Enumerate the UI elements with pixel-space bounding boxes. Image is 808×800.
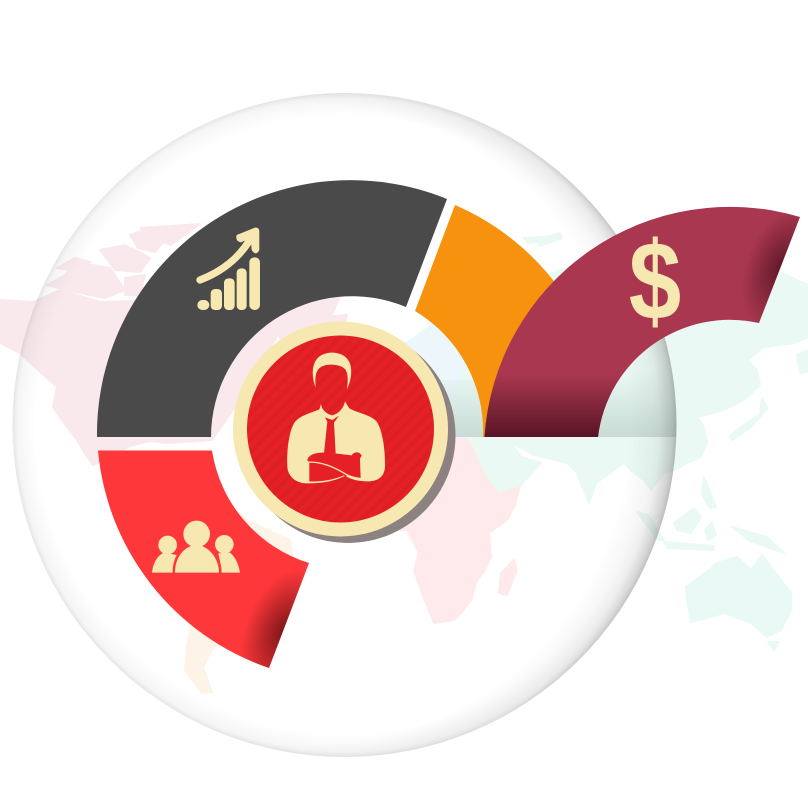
icon: growth chart with arrow: [197, 228, 260, 310]
wedge: red people: [98, 450, 309, 668]
glass disc: [12, 93, 676, 757]
icon: businessman with crossed arms: [287, 353, 385, 483]
shaded floor behind maroon arc: [444, 386, 676, 437]
wedge: dark grey growth: [97, 180, 447, 437]
icon: dollar sign: $: [629, 219, 681, 343]
map: europe: [404, 312, 484, 437]
map: north america: [0, 224, 347, 465]
map: asia: [450, 233, 808, 553]
world map background: [0, 224, 808, 693]
map: australia: [686, 555, 791, 650]
map: africa: [300, 438, 520, 623]
wedge: orange: [415, 205, 562, 437]
wedge: maroon money: [484, 207, 800, 437]
center badge: [233, 322, 456, 543]
icon: group of people: [152, 521, 240, 573]
map: south america: [185, 512, 292, 693]
